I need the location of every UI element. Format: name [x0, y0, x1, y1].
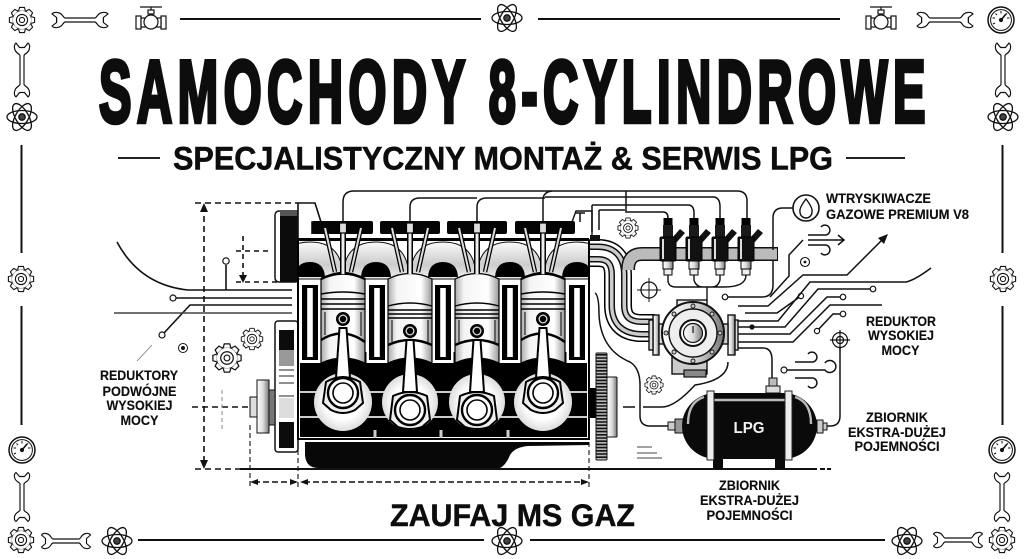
wire: left curve — [117, 242, 292, 290]
label: left reducers: MOCY — [120, 413, 159, 429]
lower pulley — [275, 321, 298, 452]
injector 1 — [660, 218, 685, 275]
wire: right target to tank — [826, 347, 840, 426]
valve covers — [298, 221, 589, 240]
subtitle rule left — [118, 157, 160, 159]
wire: trace to node — [745, 296, 801, 313]
label: injectors: WTRYSKIWACZE — [826, 191, 931, 207]
label: reducer: WYSOKIEJ — [868, 328, 934, 344]
piston 2 — [382, 274, 438, 430]
LPG tank — [668, 378, 827, 469]
icon: gear large left — [213, 344, 241, 372]
tank end fittings — [668, 419, 827, 433]
icon: wrench top-left — [52, 12, 108, 28]
label: tank right: POJEMNOŚCI — [854, 437, 940, 455]
wire: trace to node 3 — [738, 297, 840, 334]
crosshair circle — [641, 282, 657, 298]
label: tank right — [848, 410, 946, 455]
icon: valve top-left — [136, 7, 166, 29]
valve cover left stub — [298, 203, 321, 240]
border: right column icons and rules — [988, 43, 1018, 553]
arrow heads: height — [200, 203, 208, 469]
icon: gear small left — [241, 328, 263, 350]
label: tank bottom — [700, 478, 799, 524]
icon: gauge top-right — [988, 7, 1014, 33]
icon: valve top-right — [866, 7, 896, 29]
injector manifold wires — [668, 275, 746, 300]
rule: right lower — [1002, 306, 1004, 425]
icon: gear near injectors — [618, 218, 638, 238]
piston 1 — [314, 272, 372, 431]
piston 3 — [449, 274, 505, 430]
reducer bolts — [664, 304, 722, 363]
wire: rail to droplet — [773, 208, 793, 250]
tank body — [682, 393, 817, 459]
slogan: ZAUFAJ MS GAZ — [390, 497, 635, 533]
node pair — [814, 311, 846, 334]
wire: branch — [164, 305, 292, 333]
rule: top-right — [538, 18, 840, 20]
valve cover right stub — [572, 211, 592, 240]
icon: atom right — [988, 101, 1018, 133]
icon: gear bottom-left — [8, 527, 34, 553]
icon: atom bottom-left — [102, 525, 132, 557]
rule: bottom-right — [530, 539, 885, 541]
wire: curve to reducer — [623, 362, 728, 407]
rule: left lower — [20, 306, 22, 425]
icon: gear left — [8, 266, 34, 292]
target dot right — [800, 258, 810, 266]
wire: reducer to tank — [738, 348, 772, 378]
fuel rail — [628, 254, 778, 270]
label: injectors: GAZOWE PREMIUM V8 — [826, 207, 969, 223]
LPG pipe bundle — [590, 253, 655, 328]
label: tank bottom: POJEMNOŚCI — [706, 506, 792, 524]
label: reducer: MOCY — [882, 343, 920, 359]
border: left column icons and rules — [7, 43, 37, 553]
label: left reducers — [100, 368, 178, 429]
cylinder liners — [300, 280, 588, 363]
rule: bottom-left — [138, 539, 484, 541]
node at wire end — [722, 294, 728, 300]
wire: stub verticals — [576, 205, 625, 232]
injector 2 — [686, 218, 711, 275]
rule: right upper — [1002, 145, 1004, 253]
subtitle: SPECJALISTYCZNY MONTAŻ & SERWIS LPG — [173, 140, 833, 176]
icon: wrench left top — [14, 43, 30, 97]
icon: gear right — [990, 266, 1016, 292]
wire: fourth to injector 1 — [626, 191, 668, 218]
node 2 — [870, 286, 876, 292]
wire: third to injector 2 — [592, 205, 694, 218]
crank nose — [250, 380, 275, 433]
icon: droplet — [793, 195, 819, 221]
icon: gear top-left — [9, 7, 35, 33]
reducer bottom box — [672, 355, 707, 377]
spark plugs and valves — [325, 223, 561, 274]
node — [170, 295, 176, 301]
icon: wind lower — [781, 352, 836, 388]
icon: gauge left — [9, 437, 35, 463]
icon: wrench right bottom — [994, 472, 1010, 522]
reducer flanges — [649, 315, 738, 355]
wire: stem and node — [223, 258, 229, 290]
upper pulley — [275, 210, 299, 282]
wire: rail down to node — [728, 260, 773, 297]
engine — [250, 203, 617, 468]
tank highlights — [688, 397, 811, 424]
tank label: LPG — [734, 420, 764, 437]
icon: wind top — [808, 225, 844, 255]
crosshair icon — [637, 278, 661, 302]
icon: wrench bottom-left — [42, 533, 90, 549]
wire: trace to arrow — [738, 238, 884, 306]
rule: left upper — [20, 145, 22, 253]
dimension: small pulley — [236, 236, 280, 283]
label: tank right: ZBIORNIK — [866, 410, 929, 426]
dimension: vertical height — [203, 206, 205, 466]
target dot — [178, 344, 188, 352]
label: left reducers: PODWÓJNE — [102, 382, 176, 400]
intake arches — [299, 242, 588, 280]
tank top valve — [766, 378, 780, 393]
subtitle rule right — [846, 157, 905, 159]
wire: short slash — [137, 345, 152, 361]
reducer body — [662, 302, 724, 364]
icon: wrench bottom-right — [934, 532, 982, 548]
dot on trace — [749, 324, 755, 330]
crankcase — [300, 352, 587, 438]
reducer top box — [677, 300, 707, 310]
icon: gear near tank — [645, 376, 663, 394]
left schematic wires and dimensions — [114, 203, 589, 488]
oil pan — [305, 442, 589, 468]
engine to injector wires — [343, 191, 747, 232]
label: left reducers: REDUKTORY — [100, 368, 178, 384]
node 3 — [840, 294, 846, 300]
icon: wrench top-right — [917, 12, 973, 28]
piston 4 — [514, 272, 572, 431]
pipe black collar — [590, 235, 600, 241]
arrow head — [878, 234, 888, 244]
wire: diagonal stub — [770, 240, 803, 297]
dimension: crank axis — [192, 390, 248, 430]
wire: engine to tank — [595, 293, 668, 426]
icon: atom bottom-center — [492, 525, 522, 557]
wire: node line — [176, 297, 292, 299]
gas reducer — [649, 300, 738, 377]
icon: wrench right top — [995, 43, 1011, 97]
dimension: bottom width — [250, 425, 589, 488]
node on trace — [798, 293, 804, 299]
wire: long trace — [738, 268, 931, 321]
wire: top rail to injector 4 — [343, 191, 747, 221]
tank straps — [707, 391, 792, 460]
wire: trace to node 2 — [738, 289, 870, 327]
wire: short node trace — [817, 314, 840, 331]
icon: atom bottom-right — [892, 525, 922, 557]
label: tank bottom: EKSTRA-DUŻEJ — [700, 492, 799, 509]
injector 4 — [738, 218, 763, 275]
icon: gauge right — [989, 437, 1015, 463]
label: tank bottom: ZBIORNIK — [719, 478, 781, 494]
icon: gear bottom-right — [989, 527, 1015, 553]
dimension: bottom extension — [195, 468, 240, 470]
icon: atom top-center — [492, 2, 522, 34]
label: reducer — [866, 314, 936, 359]
block background — [298, 240, 589, 439]
label: left reducers: WYSOKIEJ — [106, 398, 172, 414]
right ring gear — [589, 353, 617, 460]
label: injectors — [826, 191, 969, 223]
node lower — [159, 332, 165, 338]
border: bottom row icons and rules — [42, 525, 982, 557]
target right — [830, 330, 850, 350]
right circuit wires — [595, 208, 931, 426]
rule: top-left — [180, 18, 481, 20]
ground line — [240, 468, 831, 470]
icon: atom left — [7, 101, 37, 133]
wire: long line — [114, 312, 292, 314]
short dashes — [637, 447, 662, 458]
wire: lowest trace — [738, 305, 882, 342]
injector 3 — [712, 218, 737, 275]
dimension: top extension — [195, 202, 298, 204]
tank legs — [713, 458, 785, 469]
label: reducer: REDUKTOR — [866, 314, 936, 330]
border: top row icons and rules — [9, 2, 1014, 34]
label: tank right: EKSTRA-DUŻEJ — [848, 424, 946, 441]
icon: wrench left bottom — [14, 472, 30, 522]
wire: second rail to injector 3 — [410, 191, 720, 221]
